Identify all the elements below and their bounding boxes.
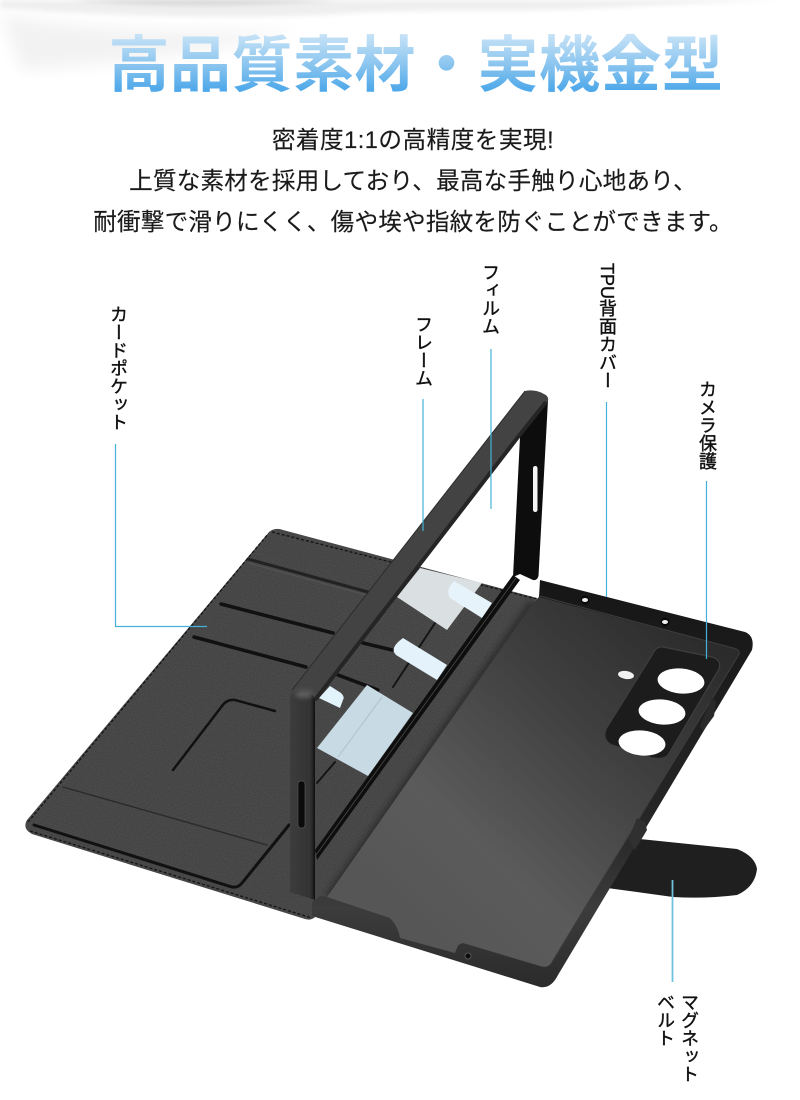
rear surface — [327, 597, 739, 967]
label: camera protection: カメラ保護 — [697, 380, 717, 470]
intro text: 密着度1:1の高精度を実現! — [272, 128, 554, 154]
magnetic belt — [600, 838, 757, 898]
shadow beside rear cover — [329, 603, 533, 897]
intro text: 耐衝撃で滑りにくく、傷や埃や指紋を防ぐことができます。 — [93, 210, 733, 236]
leader lines — [116, 349, 706, 982]
rear rail — [315, 575, 520, 860]
label: frame: フレーム — [413, 315, 433, 387]
flash — [618, 670, 634, 680]
speaker slot — [298, 781, 305, 828]
top bar — [290, 390, 548, 700]
camera island — [605, 647, 720, 759]
side key slot — [533, 466, 538, 512]
right upright — [513, 400, 548, 580]
label: card pocket: カードポケット — [108, 305, 128, 431]
button holes — [580, 596, 670, 626]
side button bump — [700, 697, 716, 731]
case shell — [312, 580, 753, 987]
film pieces — [317, 568, 492, 776]
left upright — [290, 690, 315, 900]
pocket slots — [34, 559, 435, 887]
USB port — [465, 953, 471, 959]
belt hinge notch — [628, 818, 647, 850]
label: magnetic belt: マグネット ベルト — [655, 993, 699, 1083]
TPU back cover — [312, 580, 753, 987]
metal frame — [290, 390, 548, 900]
intro text: 上質な素材を採用しており、最高な手触り心地あり、 — [129, 169, 697, 195]
label: TPU back cover: TPU背面カバー — [597, 263, 617, 389]
rim highlight — [540, 596, 739, 962]
wallet flip cover with card pockets — [25, 529, 537, 920]
label: film: フィルム — [480, 263, 500, 335]
background silk swoosh — [0, 0, 780, 70]
lens openings — [656, 666, 706, 696]
title: 高品質素材・実機金型 — [108, 31, 724, 99]
corner highlight — [295, 690, 313, 698]
intro text — [93, 128, 733, 236]
